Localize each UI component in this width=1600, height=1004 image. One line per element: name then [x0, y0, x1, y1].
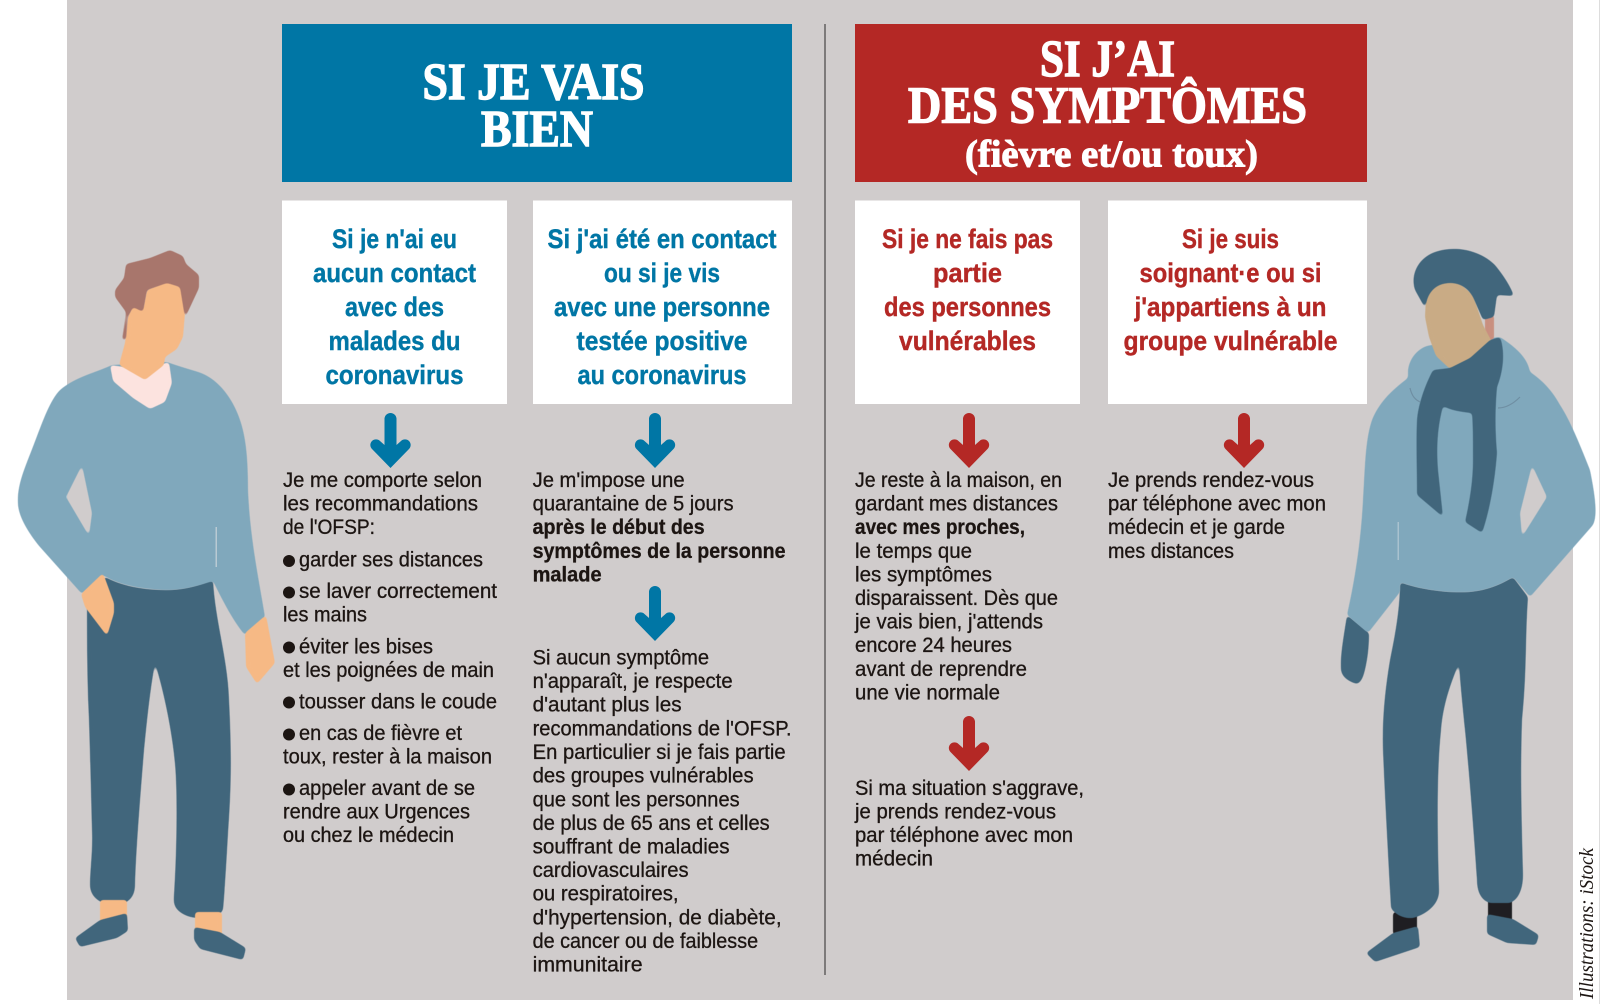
text: si aucun symptôme: n'apparaît, je respecte — [533, 670, 733, 693]
text: si aucun symptôme: des groupes vulnérables — [533, 764, 754, 788]
arrow: column 1 — [370, 413, 411, 468]
text: recommandations OFSP — [283, 469, 497, 847]
header: si je vais bien — [282, 24, 792, 182]
text: recommandations OFSP: garder ses distances — [299, 549, 483, 572]
case box: contact avec personne positive: Si j'ai été en contact — [548, 224, 776, 254]
text: je reste à la maison: gardant mes distances — [855, 492, 1058, 516]
text: si aucun symptôme: d'hypertension, de diabète, — [533, 906, 782, 930]
case box: pas vulnérable: des personnes — [884, 292, 1051, 322]
arrow: column 3 bottom — [949, 716, 989, 771]
text: recommandations OFSP: ou chez le médecin — [283, 824, 454, 847]
header: si j'ai des symptômes: SI J’AI — [1040, 31, 1175, 88]
text: recommandations OFSP: les recommandations — [283, 492, 478, 516]
case box: pas vulnérable: vulnérables — [899, 326, 1036, 356]
text: si aucun symptôme: de plus de 65 ans et celles — [533, 812, 770, 835]
case box: soignant ou vulnérable — [1108, 200, 1367, 404]
case box: soignant ou vulnérable: groupe vulnérable — [1124, 326, 1338, 356]
credit: Illustrations: iStock — [1576, 847, 1598, 1000]
text: quarantaine: symptômes de la personne — [533, 540, 786, 563]
arrow: column 4 — [1224, 413, 1264, 468]
arrow: column 2 top — [635, 413, 675, 468]
case box: contact avec personne positive — [533, 200, 792, 404]
text: si ma situation s'aggrave: médecin — [855, 848, 933, 871]
text: recommandations OFSP: rendre aux Urgences — [283, 801, 470, 824]
case box: aucun contact: coronavirus — [326, 360, 464, 390]
case box: contact avec personne positive: avec une personne — [554, 292, 770, 322]
text: recommandations OFSP: en cas de fièvre et — [299, 722, 462, 745]
text: je reste à la maison: le temps que — [855, 540, 972, 563]
text: quarantaine: malade — [533, 564, 602, 586]
text: je reste à la maison: une vie normale — [855, 682, 1000, 704]
text: rendez-vous par téléphone: médecin et je garde — [1108, 516, 1285, 539]
case box: aucun contact: Si je n'ai eu — [332, 224, 457, 254]
text: si aucun symptôme: immunitaire — [533, 954, 643, 976]
text: je reste à la maison: encore 24 heures — [855, 634, 1012, 657]
arrow: column 2 bottom — [635, 586, 675, 641]
text: je reste à la maison: Je reste à la maison, en — [855, 469, 1062, 492]
text: je reste à la maison: avec mes proches, — [855, 516, 1025, 539]
case box: aucun contact: malades du — [328, 326, 460, 356]
text: si aucun symptôme: cardiovasculaires — [533, 859, 689, 882]
case box: contact avec personne positive: au coronavirus — [578, 360, 746, 390]
left figure: man in sweater — [18, 250, 275, 960]
text: rendez-vous par téléphone: mes distances — [1108, 540, 1234, 563]
case box: soignant ou vulnérable: j'appartiens à un — [1134, 292, 1326, 322]
case box: contact avec personne positive: ou si je vis — [604, 258, 720, 288]
case box: aucun contact — [282, 200, 507, 404]
text: quarantaine — [533, 469, 786, 586]
arrow: column 3 top — [949, 413, 989, 468]
text: si aucun symptôme: En particulier si je fais partie — [533, 741, 786, 764]
text: si aucun symptôme: Si aucun symptôme — [533, 646, 709, 670]
text: rendez-vous par téléphone: par téléphone avec mon — [1108, 492, 1326, 516]
case box: pas vulnérable — [855, 200, 1080, 404]
case box: pas vulnérable: Si je ne fais pas — [882, 224, 1053, 254]
text: si ma situation s'aggrave: par téléphone avec mon — [855, 824, 1073, 847]
text: si ma situation s'aggrave: Si ma situation s'aggrave, — [855, 777, 1084, 800]
header: si j'ai des symptômes: DES SYMPTÔMES — [908, 77, 1307, 135]
text: si aucun symptôme: souffrant de maladies — [533, 836, 730, 858]
header: si je vais bien: BIEN — [481, 101, 593, 158]
right figure: sick person with hat and scarf — [1341, 249, 1596, 962]
text: recommandations OFSP: les mains — [283, 604, 367, 627]
text: je reste à la maison: je vais bien, j'attends — [854, 610, 1043, 634]
text: je reste à la maison: avant de reprendre — [855, 658, 1027, 681]
text: quarantaine: Je m'impose une — [533, 469, 685, 492]
header: si j'ai des symptômes: (fièvre et/ou toux) — [965, 134, 1258, 176]
text: si ma situation s'aggrave — [854, 777, 1084, 871]
text: je reste à la maison: les symptômes — [855, 564, 992, 586]
text: si aucun symptôme: d'autant plus les — [533, 694, 682, 716]
text: recommandations OFSP: éviter les bises — [299, 635, 433, 658]
text: si aucun symptôme: que sont les personnes — [533, 788, 740, 812]
case box: aucun contact: aucun contact — [313, 258, 476, 288]
text: recommandations OFSP: Je me comporte selon — [283, 469, 482, 492]
text: si aucun symptôme: recommandations de l'OFSP. — [533, 718, 792, 740]
case box: aucun contact: avec des — [345, 292, 444, 322]
text: si aucun symptôme — [533, 646, 792, 976]
divider — [824, 24, 826, 975]
case box: pas vulnérable: partie — [933, 258, 1002, 288]
text: recommandations OFSP: tousser dans le coude — [299, 690, 497, 713]
case box: soignant ou vulnérable: soignant·e ou si — [1140, 258, 1322, 288]
header: si je vais bien: SI JE VAIS — [422, 54, 644, 111]
text: recommandations OFSP: toux, rester à la maison — [283, 746, 492, 768]
text: quarantaine: quarantaine de 5 jours — [533, 492, 734, 516]
case box: contact avec personne positive: testée positive — [576, 326, 748, 356]
text: rendez-vous par téléphone — [1108, 469, 1326, 563]
text: recommandations OFSP: de l'OFSP: — [283, 516, 375, 539]
text: je reste à la maison — [854, 469, 1062, 704]
text: je reste à la maison: disparaissent. Dès que — [855, 587, 1058, 610]
text: recommandations OFSP: et les poignées de main — [283, 659, 494, 682]
text: si aucun symptôme: ou respiratoires, — [533, 882, 679, 906]
text: rendez-vous par téléphone: Je prends rendez-vous — [1108, 469, 1314, 492]
text: quarantaine: après le début des — [533, 516, 705, 539]
text: recommandations OFSP: appeler avant de se — [299, 777, 475, 800]
text: si ma situation s'aggrave: je prends rendez-vous — [854, 801, 1056, 824]
case box: soignant ou vulnérable: Si je suis — [1182, 224, 1279, 254]
text: recommandations OFSP: se laver correctement — [299, 580, 497, 603]
text: si aucun symptôme: de cancer ou de faiblesse — [533, 930, 758, 953]
header: si j'ai des symptômes — [855, 24, 1367, 182]
